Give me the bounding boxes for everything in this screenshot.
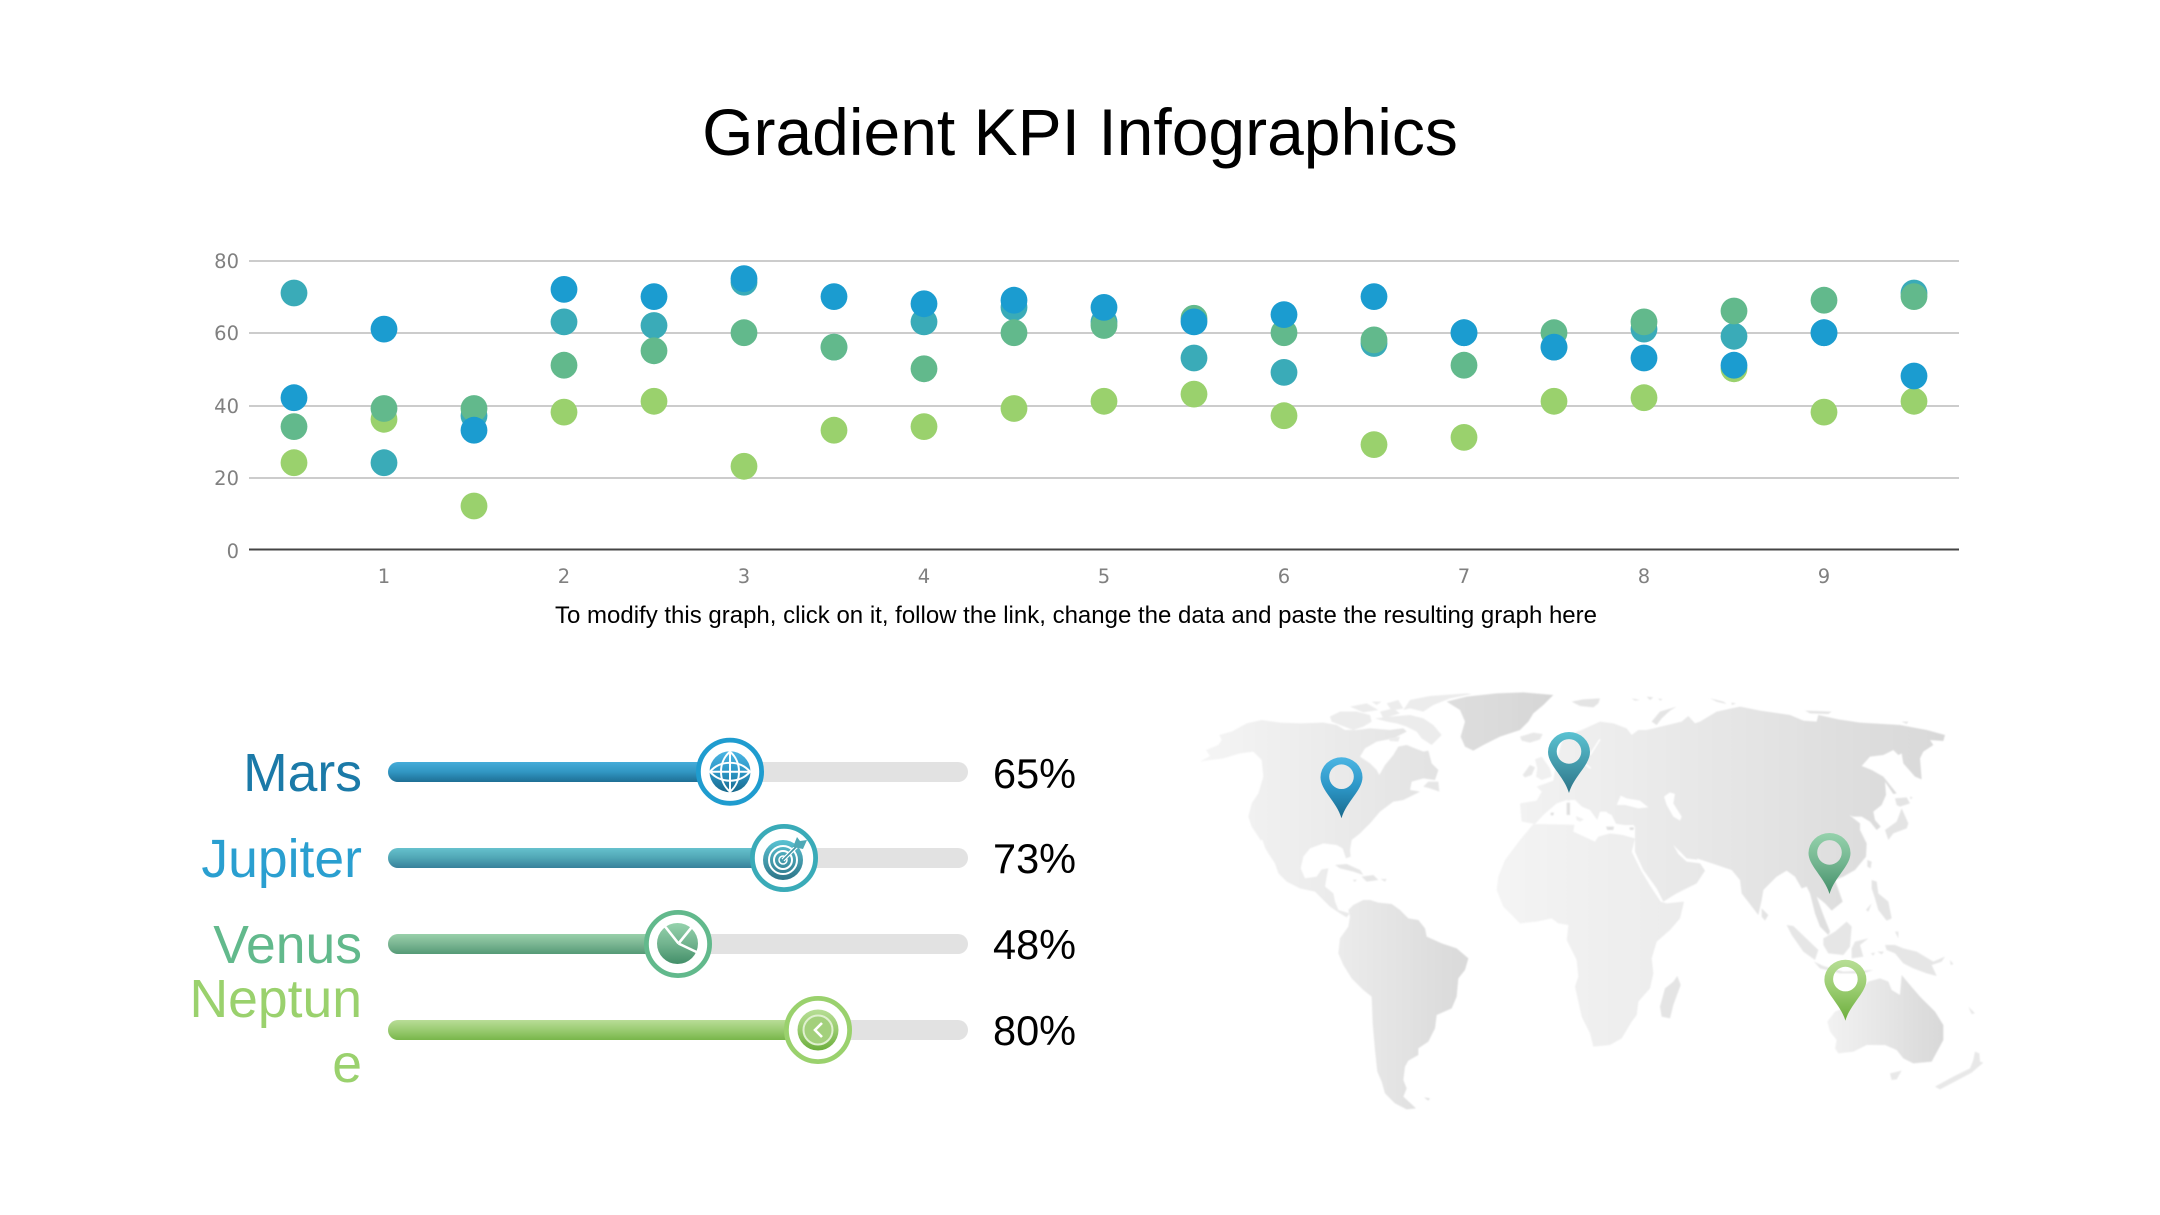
icon: globe <box>710 751 750 792</box>
Americas north <box>1200 692 1553 917</box>
Tasmania and New Zealand <box>1890 1007 1983 1089</box>
value: 48% <box>993 921 1076 968</box>
title: Gradient KPI Infographics <box>702 95 1458 169</box>
x axis labels <box>378 565 1830 588</box>
Japan, Taiwan, Philippines <box>1762 797 1913 921</box>
x axis labels: 7 <box>1458 565 1470 588</box>
map pin: Neptune <box>1824 960 1866 1021</box>
knob ring <box>786 998 850 1062</box>
Italy boot <box>1576 816 1584 822</box>
track <box>388 762 968 782</box>
progress bar 73% <box>388 848 784 868</box>
panel: world map <box>1200 692 1983 1109</box>
row: Mars <box>243 740 1076 803</box>
chart gridlines <box>249 261 1959 478</box>
Britain <box>1535 757 1552 780</box>
x axis labels: 1 <box>378 565 390 588</box>
icon: target <box>763 837 807 880</box>
Iceland, Ireland, Britain <box>1520 733 1543 777</box>
progress bar 48% <box>388 934 678 954</box>
Southern continents <box>1338 824 1684 1109</box>
map land <box>1200 692 1983 1109</box>
x axis labels: 2 <box>558 565 570 588</box>
data series: Jupiter <box>281 269 1927 476</box>
track <box>388 1020 968 1040</box>
row: Neptune <box>189 970 1076 1094</box>
x axis labels: 9 <box>1818 565 1830 588</box>
Italy and Med islands <box>1551 803 1634 830</box>
knob ring <box>698 740 762 803</box>
label: Neptune (wrapped): Neptun <box>189 970 362 1029</box>
icon: clock <box>798 1010 838 1050</box>
Indonesia and New Guinea <box>1787 922 1953 976</box>
Mediterranean group <box>1533 792 1700 863</box>
Arctic islets <box>1572 697 1908 725</box>
knob ring <box>646 912 710 976</box>
data series: Venus <box>281 283 1927 440</box>
South America <box>1338 900 1468 1109</box>
label: Neptune (wrapped): e <box>332 1035 362 1094</box>
Madagascar <box>1660 976 1681 1018</box>
track <box>388 934 968 954</box>
North America <box>1200 720 1438 917</box>
chart: scatter plot <box>214 250 1959 588</box>
value: 65% <box>993 750 1076 797</box>
x axis labels: 6 <box>1278 565 1290 588</box>
value: 73% <box>993 835 1076 882</box>
panel: KPI sliders <box>189 740 1076 1094</box>
track <box>388 848 968 868</box>
Eurasia <box>1520 707 1945 935</box>
map pin: Jupiter <box>1548 732 1590 793</box>
knob ring <box>752 826 816 890</box>
Africa <box>1497 824 1684 1047</box>
label: Venus: Venus <box>213 916 362 975</box>
data series: Mars <box>281 265 1927 444</box>
chart baseline <box>249 548 1959 550</box>
chart caption: To modify this graph, click on it, follow the link, change the data and paste the resulting graph here <box>555 602 1597 629</box>
x axis labels: 5 <box>1098 565 1110 588</box>
map pin: Venus <box>1808 833 1850 894</box>
y axis labels <box>214 250 239 563</box>
map pin: Mars <box>1320 757 1362 818</box>
row: Venus <box>213 912 1076 976</box>
Baja strait <box>1262 840 1269 864</box>
y axis labels: 80 <box>214 250 239 273</box>
Mediterranean, Black Sea, Caspian, Gulf <box>1533 792 1700 863</box>
y axis labels: 0 <box>227 540 239 563</box>
Newfoundland and Caribbean <box>1335 782 1439 882</box>
row: Jupiter <box>201 826 1076 890</box>
progress bar 65% <box>388 762 730 782</box>
y axis labels: 20 <box>214 467 239 490</box>
data series: Neptune <box>281 355 1927 519</box>
label: Jupiter: Jupiter <box>201 830 362 889</box>
value: 80% <box>993 1007 1076 1054</box>
label: Mars: Mars <box>243 744 362 803</box>
Eurasia group <box>1520 697 1945 935</box>
y axis labels: 60 <box>214 322 239 345</box>
Australia <box>1827 975 1943 1063</box>
x axis labels: 4 <box>918 565 930 588</box>
Canadian arctic islands <box>1330 693 1472 745</box>
icon: pie chart <box>657 923 698 964</box>
Oceania group <box>1787 922 1983 1089</box>
y axis labels: 40 <box>214 395 239 418</box>
progress bar 80% <box>388 1020 818 1040</box>
Baltic strait <box>1585 739 1600 768</box>
x axis labels: 3 <box>738 565 750 588</box>
x axis labels: 8 <box>1638 565 1650 588</box>
Greenland <box>1447 692 1553 751</box>
